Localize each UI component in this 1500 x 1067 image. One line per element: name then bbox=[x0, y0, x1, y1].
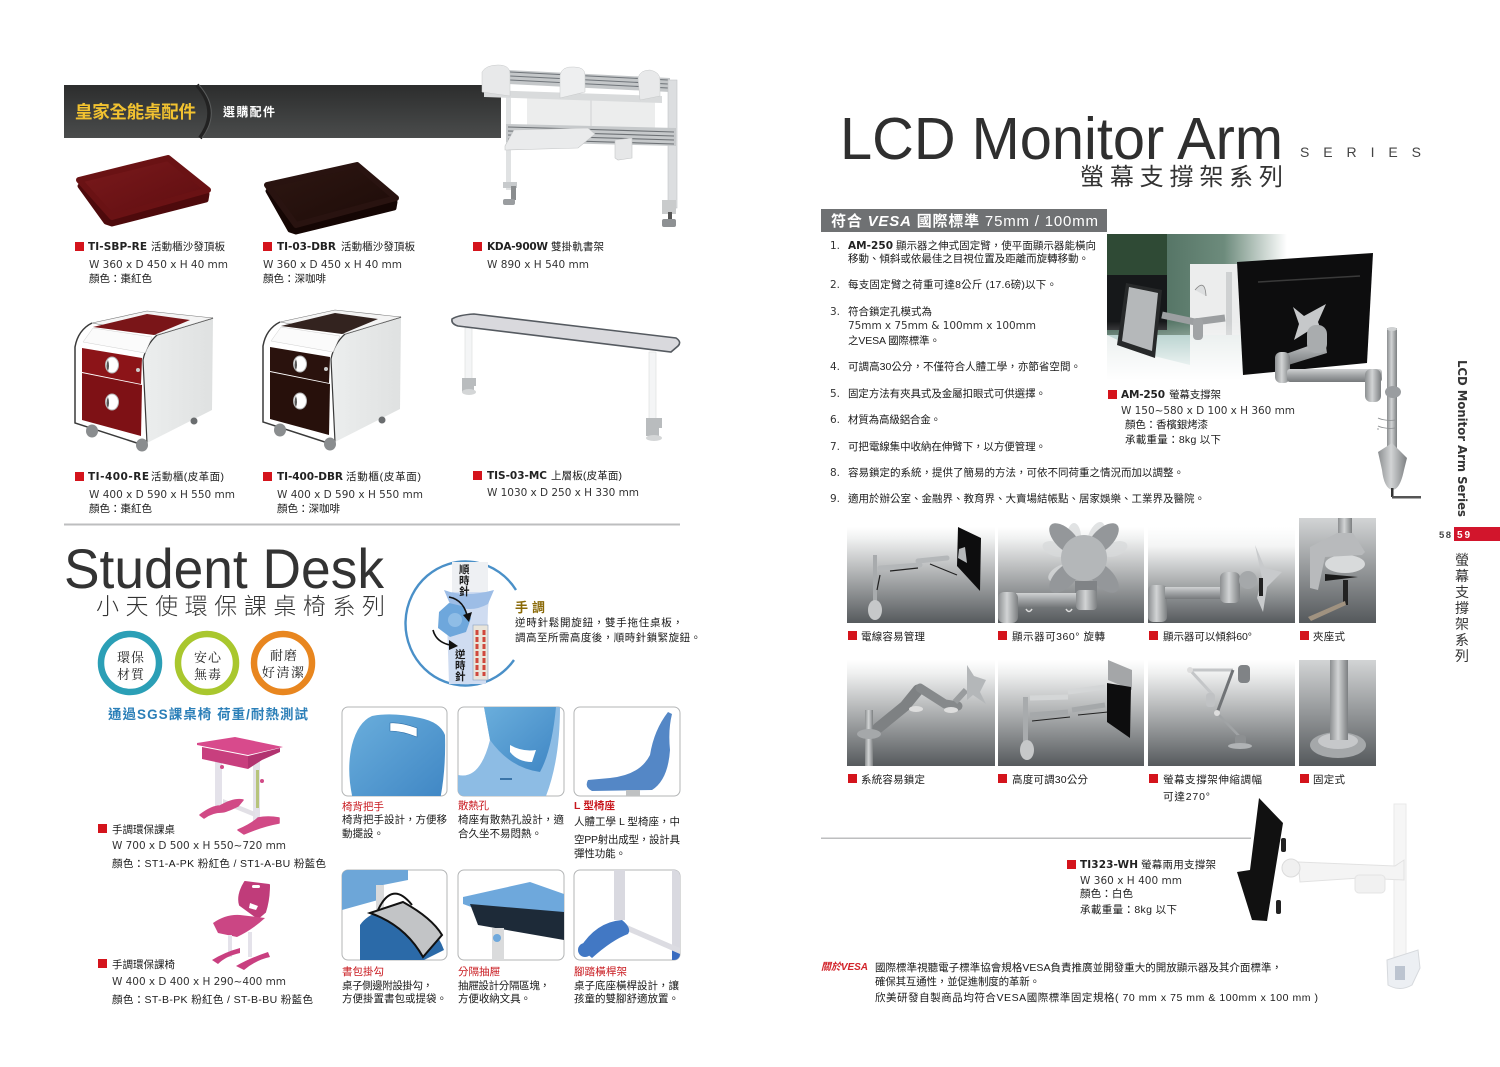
spec: TI-400-DBR: TI-400-DBR bbox=[277, 471, 343, 483]
caption: 桌子底座橫桿設計，讓 bbox=[574, 979, 680, 992]
feature list: 6. bbox=[830, 414, 840, 426]
feature list: 移動、傾斜或依最佳之目視位置及距離而旋轉移動。 bbox=[848, 252, 1089, 265]
footnote: about VESA bbox=[821, 961, 1318, 1004]
caption: 孩童的雙腳舒適放置。 bbox=[574, 992, 679, 1005]
badge: non-toxic bbox=[178, 634, 236, 692]
spec: adjustable desk: 顏色：ST1-A-PK 粉紅色 / ST1-A-BU 粉藍色 bbox=[112, 857, 326, 870]
spec: TI323-WH: W 360 x H 400 mm bbox=[1080, 875, 1182, 887]
feature photo: clamp mount bbox=[1299, 518, 1376, 623]
badge: eco material bbox=[101, 634, 159, 692]
caption: 桌子側邊附設掛勾， bbox=[342, 979, 433, 992]
diagram: height adjustment knob: 針 bbox=[459, 585, 470, 598]
feature caption: 60 tilt: 顯示器可以傾斜60° bbox=[1163, 630, 1252, 643]
feature list: 固定方法有夾具式及金屬扣眼式可供選擇。 bbox=[848, 387, 1046, 400]
product image: TI-03-DBR dark cushion bbox=[267, 165, 396, 232]
side label: Chinese series name: 幕 bbox=[1455, 568, 1469, 584]
feature caption: fixed bbox=[1300, 773, 1346, 786]
spec: TI-03-DBR: TI-03-DBR bbox=[277, 241, 336, 253]
feature photo: 270 degree extension bbox=[1148, 660, 1295, 766]
caption: 抽屜設計分隔區塊， bbox=[458, 979, 550, 992]
side label: Chinese series name: 系 bbox=[1455, 632, 1469, 648]
spec: TI323-WH: TI323-WH bbox=[1080, 859, 1138, 871]
spec: KDA-900W: KDA-900W bbox=[487, 241, 548, 253]
SGS certification line: 通過SGS課桌椅 荷重/耐熱測試 bbox=[108, 706, 308, 722]
feature list: 每支固定臂之荷重可達8公斤 (17.6磅)以下。 bbox=[848, 278, 1057, 291]
spec: TI-SBP-RE: 活動櫃沙發頂板 bbox=[151, 240, 226, 253]
spec: TIS-03-MC: TIS-03-MC bbox=[487, 470, 547, 482]
page numbers: 58 bbox=[1439, 530, 1451, 541]
feature card: footrest bar bbox=[574, 870, 680, 1005]
feature list: 4. bbox=[830, 361, 840, 373]
callout: manual adjustment bbox=[515, 600, 701, 644]
spec: adjustable chair: W 400 x D 400 x H 290~400 mm bbox=[112, 976, 286, 988]
spec: TI-03-DBR: 顏色：深咖啡 bbox=[263, 272, 326, 285]
page numbers: 59 bbox=[1457, 530, 1470, 541]
feature caption: 270 extension: 可達270° bbox=[1163, 791, 1210, 803]
spec: TI-400-RE: TI-400-RE bbox=[88, 471, 149, 483]
diagram: height adjustment knob: 逆 bbox=[455, 648, 466, 661]
feature list: 2. bbox=[830, 279, 840, 291]
spec: AM-250: 承載重量：8kg 以下 bbox=[1125, 433, 1221, 446]
feature list: 8. bbox=[830, 467, 840, 479]
badge: eco material: 環保 bbox=[117, 647, 145, 666]
feature caption: easy lock: 系統容易鎖定 bbox=[861, 773, 926, 786]
spec: TI-03-DBR bbox=[263, 240, 416, 285]
caption: 方便收納文具。 bbox=[458, 992, 531, 1005]
spec: TI-03-DBR: 活動櫃沙發頂板 bbox=[341, 240, 416, 253]
banner subtitle: 選購配件 bbox=[223, 104, 275, 119]
product image: TI-SBP-RE red cushion bbox=[79, 158, 208, 224]
side label: Chinese series name: 列 bbox=[1455, 648, 1469, 664]
spec: TI-400-RE: 顏色：棗紅色 bbox=[89, 502, 152, 515]
heading: Student Desk: 小天使環保課桌椅系列 bbox=[96, 593, 385, 619]
spec: TIS-03-MC: W 1030 x D 250 x H 330 mm bbox=[487, 487, 639, 499]
callout: manual adjustment: 手調 bbox=[515, 600, 545, 615]
heading: LCD Monitor Arm: 螢幕支撐架系列 bbox=[1080, 164, 1283, 191]
spec: AM-250: AM-250 bbox=[1121, 389, 1165, 401]
caption: 書包掛勾 bbox=[342, 965, 384, 978]
spec: TI-SBP-RE: 顏色：棗紅色 bbox=[89, 272, 152, 285]
spec: KDA-900W: W 890 x H 540 mm bbox=[487, 259, 589, 271]
spec: TI323-WH: 承載重量：8kg 以下 bbox=[1080, 903, 1177, 916]
spec: AM-250 bbox=[1108, 388, 1295, 446]
badge: eco material: 材質 bbox=[117, 664, 145, 683]
side label: Chinese series name: 架 bbox=[1455, 616, 1469, 632]
banner title: 皇家全能桌配件 bbox=[75, 102, 196, 122]
feature list: 容易鎖定的系統，提供了簡易的方法，可依不同荷重之情況而加以調整。 bbox=[848, 466, 1184, 479]
footnote: about VESA: 關於VESA bbox=[821, 961, 868, 973]
feature photo: 60 degree tilt bbox=[1148, 527, 1295, 623]
caption bbox=[342, 800, 448, 840]
footnote: about VESA: 國際標準視聽電子標準協會規格VESA負責推廣並開發重大的開放顯示器及其介面標準， bbox=[875, 961, 1282, 974]
feature card: ventilation hole bbox=[458, 707, 564, 840]
product photo: AM-250 in office bbox=[1107, 234, 1287, 380]
feature list bbox=[830, 239, 1205, 505]
badge: durable: 耐磨 bbox=[270, 645, 297, 664]
feature caption: clamp bbox=[1300, 630, 1346, 643]
feature list: 符合鎖定孔模式為 bbox=[848, 305, 932, 318]
caption: 椅座有散熱孔設計，適 bbox=[458, 813, 564, 826]
spec: TI323-WH bbox=[1067, 858, 1216, 916]
badge: non-toxic: 無毒 bbox=[194, 664, 221, 683]
caption: 方便掛置書包或提袋。 bbox=[342, 992, 447, 1005]
feature caption: 270 extension bbox=[1149, 773, 1262, 803]
spec: TI-400-RE bbox=[75, 470, 235, 515]
caption bbox=[458, 799, 564, 840]
page numbers bbox=[1439, 527, 1500, 541]
side label: Chinese series name bbox=[1455, 552, 1469, 664]
spec: TI-SBP-RE: W 360 x D 450 x H 40 mm bbox=[89, 259, 228, 271]
spec: TI-SBP-RE bbox=[75, 240, 228, 285]
feature photo: fixed mount bbox=[1299, 660, 1376, 766]
feature list: 9. bbox=[830, 493, 840, 505]
feature list: AM-250 顯示器之伸式固定臂，使平面顯示器能橫向 bbox=[848, 239, 1096, 252]
feature card: drawer bbox=[458, 870, 564, 1005]
heading: LCD Monitor Arm: SERIES bbox=[1300, 144, 1421, 160]
side label: Chinese series name: 支 bbox=[1455, 584, 1469, 600]
spec: adjustable desk: 手調環保課桌 bbox=[112, 823, 175, 836]
product image: TI-400-DBR dark cabinet bbox=[263, 310, 401, 450]
caption bbox=[574, 799, 680, 860]
spec: TI-400-RE: W 400 x D 590 x H 550 mm bbox=[89, 489, 235, 501]
feature photo: cable management bbox=[847, 527, 995, 623]
side label: series name: LCD Monitor Arm Series bbox=[1455, 360, 1470, 517]
spec: adjustable chair: 手調環保課椅 bbox=[112, 958, 176, 971]
feature photo: height adjustable bbox=[998, 660, 1144, 766]
caption bbox=[458, 965, 550, 1005]
feature list: 可把電線集中收納在伸臂下，以方便管理。 bbox=[848, 440, 1046, 453]
feature list: 適用於辦公室、金融界、教育界、大賣場結帳點、居家娛樂、工業界及醫院。 bbox=[848, 492, 1205, 505]
caption: 合久坐不易悶熱。 bbox=[458, 827, 542, 840]
spec: adjustable chair bbox=[98, 958, 314, 1006]
product image: pink chair bbox=[212, 882, 270, 970]
spec: adjustable desk: W 700 x D 500 x H 550~720 mm bbox=[112, 840, 286, 852]
feature list: 75mm x 75mm & 100mm x 100mm bbox=[848, 320, 1036, 332]
spec: AM-250: 顏色：香檳銀烤漆 bbox=[1125, 418, 1208, 431]
heading: Student Desk: Student Desk bbox=[64, 537, 385, 600]
feature list: 7. bbox=[830, 441, 840, 453]
caption: 分隔抽屜 bbox=[458, 965, 500, 978]
caption: 空PP射出成型，設計具 bbox=[574, 833, 680, 846]
caption: 動擺設。 bbox=[342, 827, 384, 840]
feature list: 可調高30公分，不僅符合人體工學，亦節省空間。 bbox=[848, 360, 1081, 373]
side label: Chinese series name: 撐 bbox=[1455, 600, 1469, 616]
spec: TI-SBP-RE: TI-SBP-RE bbox=[88, 241, 147, 253]
side label: Chinese series name: 螢 bbox=[1455, 552, 1469, 568]
footnote: about VESA: 欣美研發自製商品均符合VESA國際標準固定規格( 70 mm x 75 mm & 100mm x 100 mm ) bbox=[875, 991, 1318, 1004]
feature caption: height: 高度可調30公分 bbox=[1012, 773, 1088, 786]
spec: TI323-WH: 螢幕兩用支撐架 bbox=[1141, 858, 1216, 871]
spec: TIS-03-MC: 上層板(皮革面) bbox=[551, 469, 622, 482]
caption: 彈性功能。 bbox=[574, 847, 626, 860]
feature list: 之VESA 國際標準。 bbox=[848, 334, 940, 347]
spec: TI323-WH: 顏色：白色 bbox=[1080, 887, 1134, 900]
badge: durable: 好清潔 bbox=[262, 662, 304, 681]
feature caption: 270 extension: 螢幕支撐架伸縮調幅 bbox=[1163, 773, 1262, 786]
product image: TI-400-RE red cabinet bbox=[75, 311, 213, 452]
footnote: about VESA: 確保其互通性，並促進制度的革新。 bbox=[875, 975, 1040, 988]
caption: 人體工學 L 型椅座，中 bbox=[574, 815, 680, 828]
feature card: L-shaped seat bbox=[574, 707, 680, 860]
heading: LCD Monitor Arm: LCD Monitor Arm bbox=[840, 106, 1283, 172]
callout: manual adjustment: 調高至所需高度後，順時針鎖緊旋鈕。 bbox=[515, 631, 701, 644]
feature list: 1. bbox=[830, 240, 840, 252]
product image: AM-250 monitor arm bbox=[1237, 253, 1421, 498]
spec: adjustable desk bbox=[98, 823, 326, 870]
caption: L 型椅座 bbox=[574, 799, 616, 812]
product image: pink desk bbox=[197, 737, 283, 834]
product image: KDA-900W double rail bookshelf bbox=[482, 65, 677, 227]
feature list: 5. bbox=[830, 388, 840, 400]
spec: TIS-03-MC bbox=[473, 469, 639, 499]
spec: TI-400-DBR: 顏色：深咖啡 bbox=[277, 502, 340, 515]
diagram: height adjustment knob: 時 bbox=[459, 574, 470, 587]
spec: AM-250: W 150~580 x D 100 x H 360 mm bbox=[1121, 405, 1295, 417]
feature caption: fixed: 固定式 bbox=[1313, 773, 1346, 786]
diagram: height adjustment knob: 時 bbox=[455, 659, 466, 672]
heading: LCD Monitor Arm bbox=[840, 106, 1421, 191]
caption: 椅背把手設計，方便移 bbox=[342, 813, 448, 826]
caption bbox=[574, 965, 680, 1005]
spec: TI-400-RE: 活動櫃(皮革面) bbox=[151, 470, 224, 483]
caption: 腳踏橫桿架 bbox=[574, 965, 627, 978]
diagram: height adjustment knob: 順 bbox=[459, 564, 470, 576]
feature card: backrest handle bbox=[342, 707, 448, 840]
feature list: 材質為高級鋁合金。 bbox=[848, 413, 941, 426]
feature caption: cable management: 電線容易管理 bbox=[861, 630, 926, 643]
feature caption: 360 rotation: 顯示器可360° 旋轉 bbox=[1012, 630, 1106, 643]
callout: manual adjustment: 逆時針鬆開旋鈕，雙手拖住桌板， bbox=[515, 616, 683, 629]
spec: adjustable chair: 顏色：ST-B-PK 粉紅色 / ST-B-BU 粉藍色 bbox=[112, 993, 314, 1006]
feature photo: easy lock system bbox=[847, 660, 995, 766]
diagram: height adjustment knob bbox=[406, 561, 516, 685]
product image: TIS-03-MC upper shelf bbox=[452, 314, 680, 441]
caption bbox=[342, 965, 447, 1005]
badge: durable bbox=[254, 634, 312, 692]
spec: TI-400-DBR bbox=[263, 470, 423, 515]
caption: 椅背把手 bbox=[342, 800, 384, 813]
diagram: height adjustment knob: 針 bbox=[455, 670, 466, 683]
caption: 散熱孔 bbox=[458, 799, 490, 812]
feature list: 3. bbox=[830, 306, 840, 318]
product image: TI323-WH monitor arm bbox=[1237, 798, 1420, 988]
spec: KDA-900W bbox=[473, 240, 604, 271]
spec: KDA-900W: 雙掛軌書架 bbox=[551, 240, 604, 253]
badge: non-toxic: 安心 bbox=[194, 647, 222, 666]
feature photo: 360 degree rotation bbox=[998, 518, 1144, 623]
spec: TI-400-DBR: W 400 x D 590 x H 550 mm bbox=[277, 489, 423, 501]
spec: TI-03-DBR: W 360 x D 450 x H 40 mm bbox=[263, 259, 402, 271]
feature card: bag hook bbox=[342, 870, 447, 1005]
feature caption: clamp: 夾座式 bbox=[1313, 630, 1346, 643]
header banner bbox=[64, 85, 501, 138]
section bar: VESA standard: 符合 VESA 國際標準 75mm / 100mm bbox=[831, 212, 1098, 230]
section bar: VESA standard bbox=[821, 209, 1107, 232]
spec: AM-250: 螢幕支撐架 bbox=[1169, 388, 1221, 401]
spec: TI-400-DBR: 活動櫃(皮革面) bbox=[346, 470, 421, 483]
